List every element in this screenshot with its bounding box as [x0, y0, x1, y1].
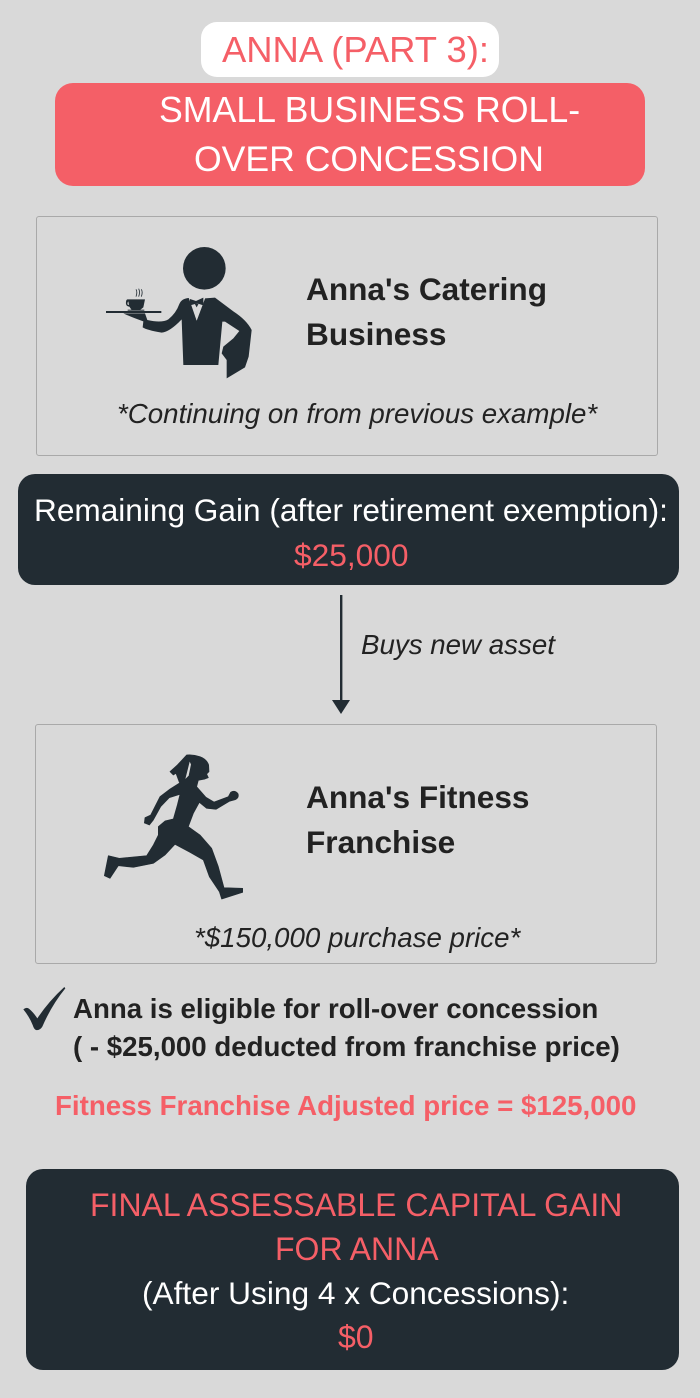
heading: Anna's Fitness Franchise: Anna's Fitness — [306, 779, 529, 815]
panel: final assessable capital gain: FINAL ASSESSABLE CAPITAL GAIN — [90, 1187, 622, 1223]
heading: Anna's Catering Business: Anna's Catering — [306, 271, 547, 307]
text: adjusted price: Fitness Franchise Adjusted price = $125,000 — [55, 1090, 636, 1121]
panel: final assessable capital gain: FOR ANNA — [275, 1231, 439, 1267]
icon: check mark — [23, 987, 66, 1030]
icon: running woman — [104, 754, 243, 900]
panel: final assessable capital gain — [26, 1169, 679, 1370]
label: buys new asset: Buys new asset — [361, 629, 555, 660]
icon: waiter with tray — [106, 247, 252, 378]
panel: Anna's fitness franchise — [35, 724, 657, 964]
panel: final assessable capital gain: (After Using 4 x Concessions): — [142, 1275, 569, 1311]
heading: small business roll-over concession — [55, 83, 645, 186]
heading: small business roll-over concession: OVER CONCESSION — [194, 139, 544, 179]
heading: Anna's Catering Business: Business — [306, 316, 446, 352]
title: Anna part 3 — [201, 22, 499, 77]
panel: remaining gain: $25,000 — [294, 537, 409, 573]
panel: final assessable capital gain: $0 — [338, 1319, 374, 1355]
arrow: down to new asset — [332, 595, 350, 714]
text: eligibility — [73, 993, 620, 1062]
heading: Anna's Fitness Franchise: Franchise — [306, 824, 455, 860]
panel: remaining gain: Remaining Gain (after retirement exemption): — [34, 492, 668, 528]
panel: Anna's catering business — [36, 216, 658, 456]
note: continuing from previous example: *Continuing on from previous example* — [117, 398, 597, 429]
text: eligibility: ( - $25,000 deducted from franchise price) — [73, 1031, 620, 1062]
panel: remaining gain — [18, 474, 679, 585]
heading: small business roll-over concession: SMALL BUSINESS ROLL- — [159, 90, 580, 130]
text: eligibility: Anna is eligible for roll-over concession — [73, 993, 598, 1024]
title: Anna part 3: ANNA (PART 3): — [222, 29, 489, 70]
heading: Anna's Fitness Franchise — [306, 779, 529, 860]
note: purchase price: *$150,000 purchase price* — [194, 922, 520, 953]
heading: Anna's Catering Business — [306, 271, 547, 352]
